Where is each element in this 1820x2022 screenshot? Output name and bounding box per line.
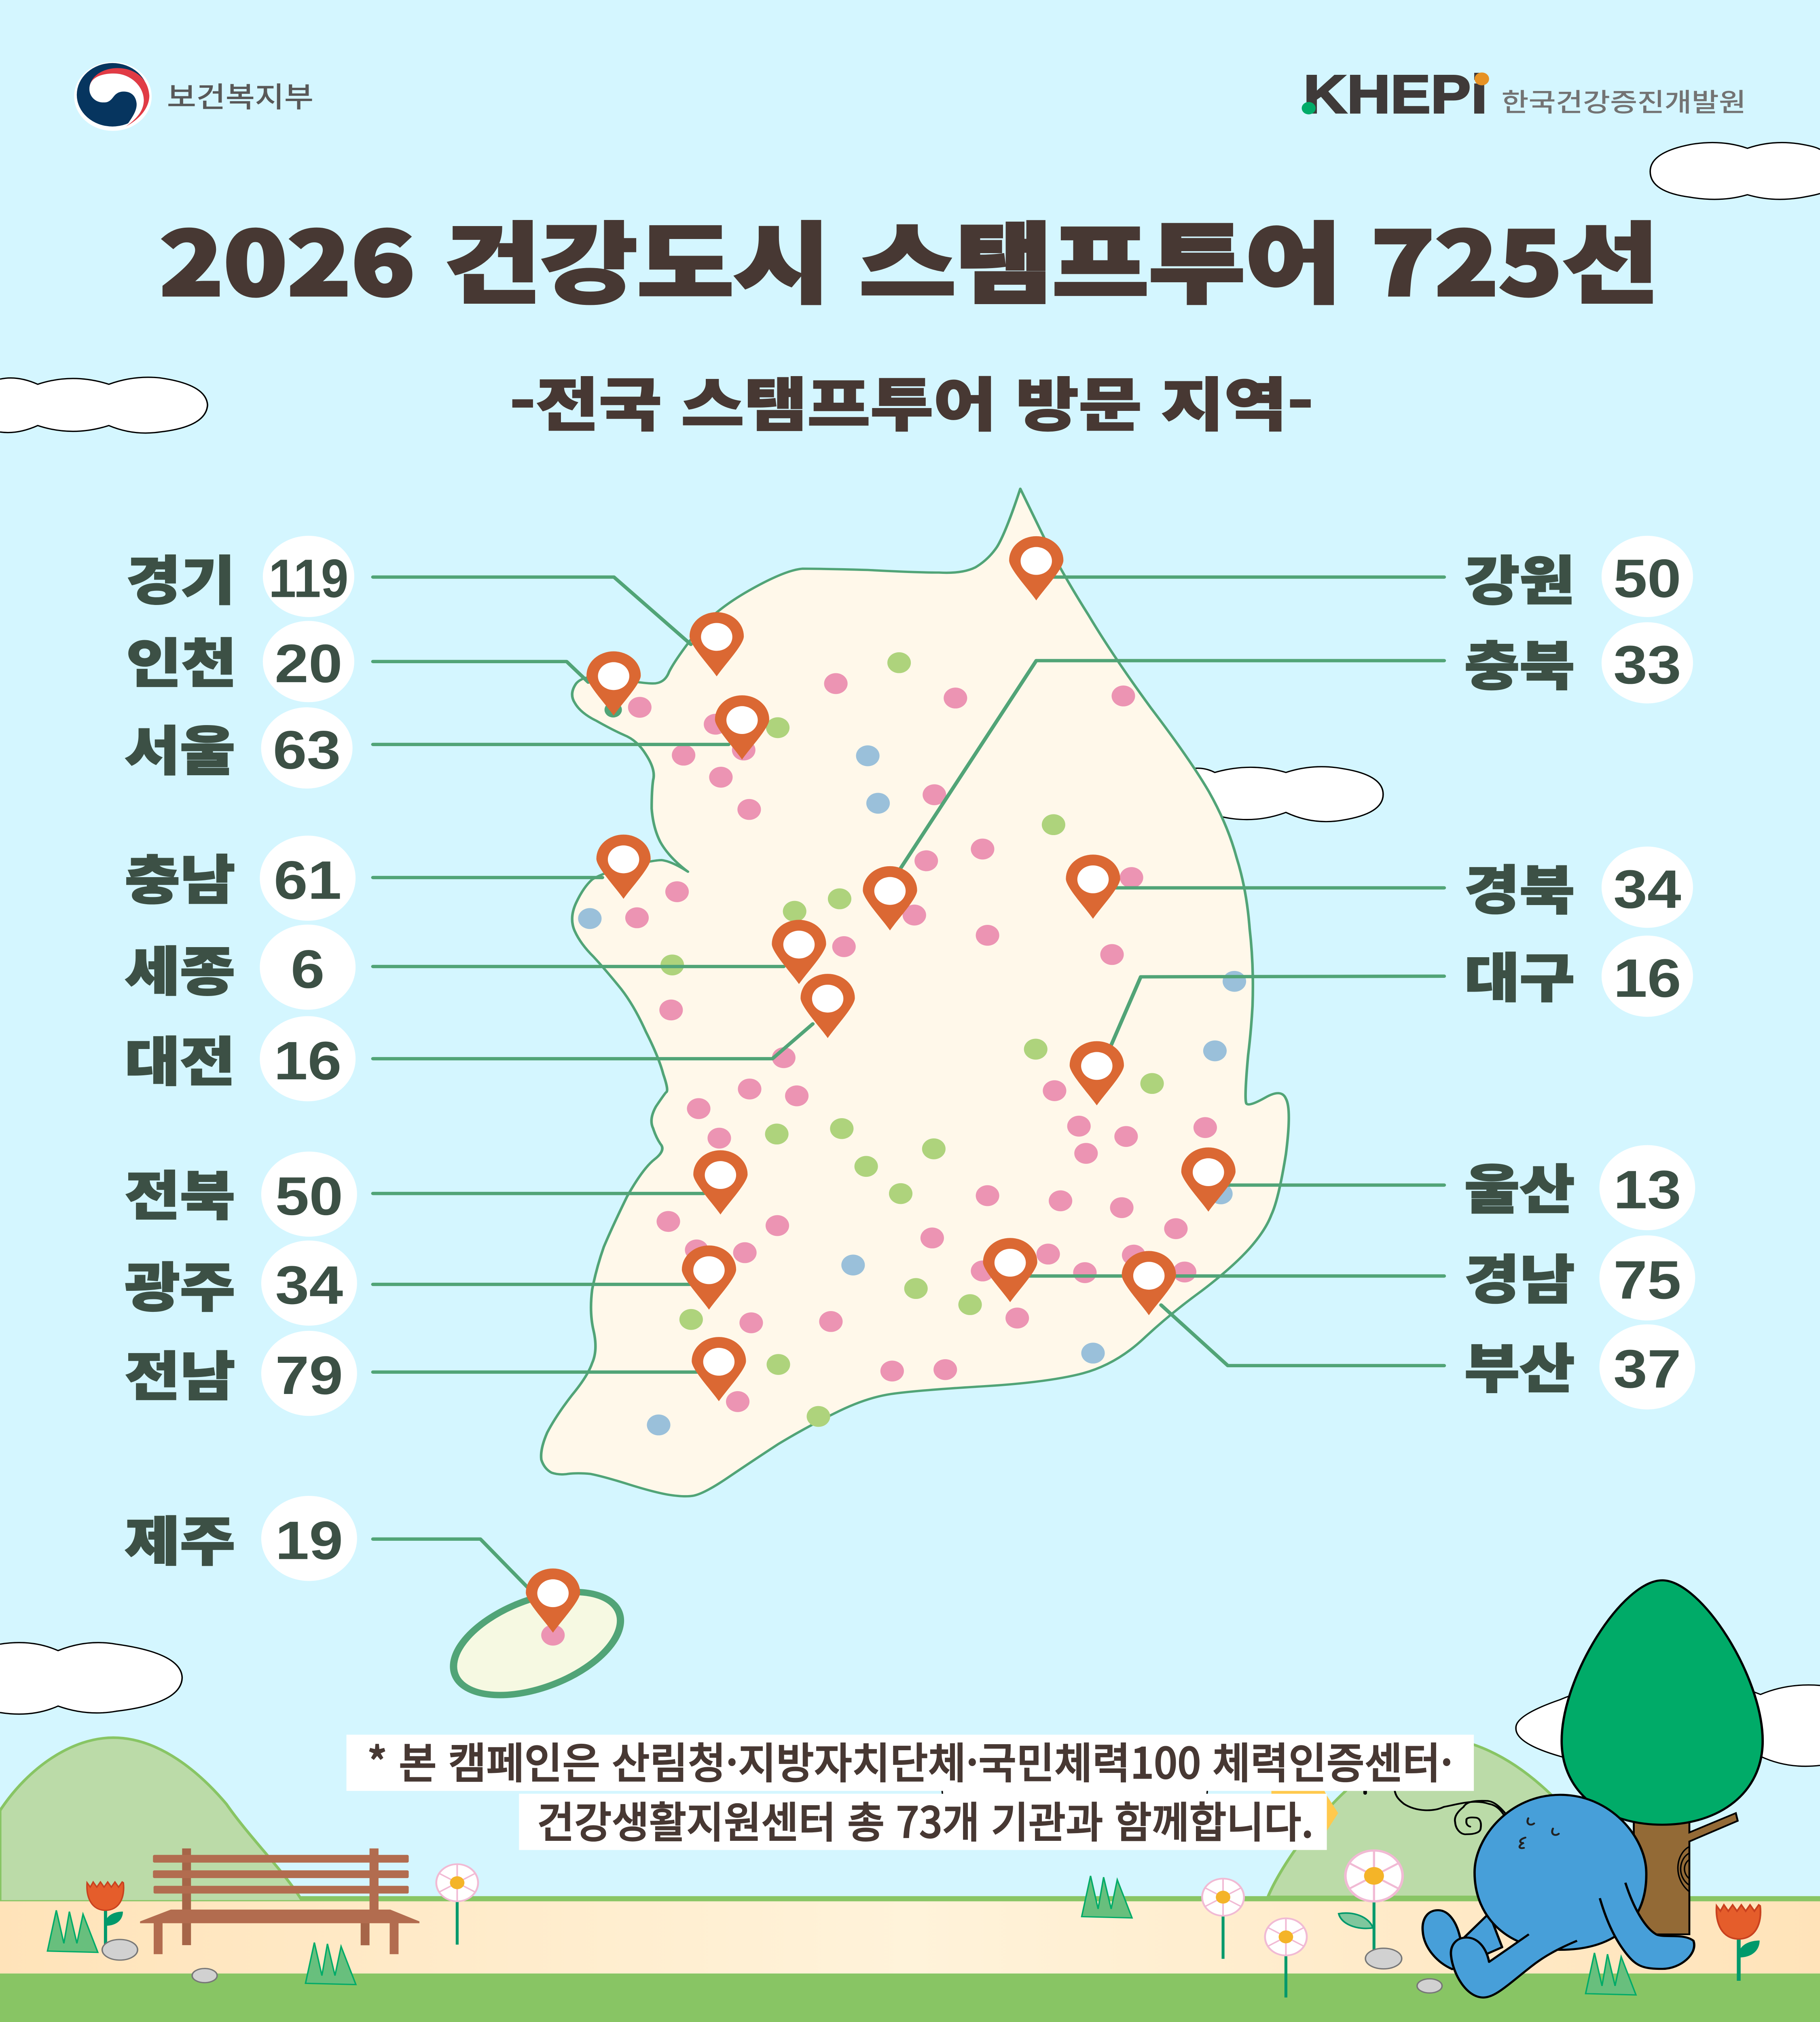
ground strip xyxy=(0,1896,1820,1902)
label: 전북 50: 전북 xyxy=(125,1154,235,1230)
cloud: behind tree xyxy=(1516,1681,1820,1766)
label: 울산 13 xyxy=(1464,1145,1695,1230)
tree xyxy=(1562,1580,1763,1934)
label: 경북 34 xyxy=(1464,846,1693,928)
flower: large xyxy=(1339,1851,1403,1950)
grass: left xyxy=(47,1910,98,1952)
logo: KHEPi: 한국건강증진개발원 xyxy=(1501,81,1746,119)
logo: Ministry of Health and Welfare xyxy=(74,62,313,131)
label: 인천 20 xyxy=(126,621,354,702)
label: 서울 63: 서울 xyxy=(125,709,235,785)
tulip: left xyxy=(87,1882,124,1945)
label: 강원 50: 강원 xyxy=(1464,539,1575,615)
label: 광주 34: 34 xyxy=(275,1255,343,1316)
stone: left xyxy=(102,1940,138,1960)
flower: middle 2 xyxy=(1265,1918,1307,1997)
label: 강원 50: 50 xyxy=(1613,548,1681,609)
grass: right xyxy=(1585,1953,1636,1995)
map dots: green xyxy=(605,652,1164,1427)
label: 광주 34: 광주 xyxy=(125,1246,235,1322)
stone: middle xyxy=(1365,1948,1402,1969)
flower: bench side xyxy=(436,1864,478,1945)
label: 경기 119: 경기 xyxy=(126,539,235,615)
label: 경남 75: 경남 xyxy=(1464,1238,1575,1314)
label: 부산 37: 37 xyxy=(1613,1339,1681,1399)
label: 전남 79: 전남 xyxy=(125,1335,235,1411)
map: mainland Korea xyxy=(541,489,1289,1496)
location pins xyxy=(526,536,1236,1633)
map dots: pink xyxy=(541,673,1217,1646)
cloud: top right xyxy=(1650,143,1820,199)
label: 전남 79: 79 xyxy=(275,1345,343,1406)
sand path xyxy=(0,1901,1820,1973)
label: 제주 19 xyxy=(125,1496,357,1581)
label: 세종 6: 6 xyxy=(291,939,325,1000)
label: 전북 50: 50 xyxy=(275,1166,343,1227)
label: 제주 19: 19 xyxy=(275,1510,343,1571)
hill: right xyxy=(1268,1737,1596,1897)
label: 대전 16: 대전 xyxy=(125,1020,235,1096)
label: 대구 16 xyxy=(1464,935,1693,1017)
tulip: right xyxy=(1716,1905,1761,1981)
label: 충북 33: 충북 xyxy=(1464,624,1575,700)
label: 대전 16 xyxy=(125,1016,356,1101)
cloud: behind map xyxy=(1176,767,1383,822)
label: 인천 20: 인천 xyxy=(126,622,237,698)
character: blue blob resting against tree xyxy=(1422,1795,1694,1997)
label: 경기 119 xyxy=(126,536,354,617)
grass: bench xyxy=(305,1943,356,1985)
label: 서울 63: 63 xyxy=(273,720,341,780)
label: 대구 16: 대구 xyxy=(1464,936,1575,1012)
label: 서울 63 xyxy=(125,707,353,789)
cloud: upper left xyxy=(0,377,207,433)
note box: 건강생활지원센터 총 73개 기관과 함께합니다. xyxy=(537,1789,1314,1850)
stone: small left xyxy=(192,1969,217,1983)
subtitle: -전국 스탬프투어 방문 지역- xyxy=(510,358,1314,442)
label: 인천 20: 20 xyxy=(275,634,343,694)
label: 충남 61 xyxy=(125,835,356,921)
label: 울산 13: 13 xyxy=(1613,1160,1681,1220)
label: 충북 33: 33 xyxy=(1613,635,1681,695)
note box: * 본 캠페인은 산림청·지방자치단체·국민체력100 체력인증센터· xyxy=(367,1729,1453,1791)
character face xyxy=(1519,1818,1559,1848)
label: 부산 37 xyxy=(1464,1324,1695,1409)
note box xyxy=(347,1729,1474,1850)
label: 전북 50 xyxy=(125,1152,357,1237)
cloud behind note xyxy=(942,1789,1208,1796)
label: 경북 34: 34 xyxy=(1613,859,1681,920)
label: 경북 34: 경북 xyxy=(1464,848,1575,925)
label: 부산 37: 부산 xyxy=(1464,1327,1575,1403)
label: 충북 33 xyxy=(1464,622,1693,703)
swirl wind xyxy=(1365,1787,1512,1834)
hill: left xyxy=(0,1738,303,1901)
label: 세종 6: 세종 xyxy=(125,930,235,1006)
title: 2026 건강도시 스탬프투어 725선 xyxy=(160,194,1659,321)
leader lines xyxy=(373,577,1444,1593)
bench xyxy=(140,1849,419,1954)
logo: KHEPi xyxy=(1302,64,1746,125)
logo: KHEPi: KHEPi xyxy=(1303,64,1488,125)
label: 대전 16: 16 xyxy=(274,1031,342,1091)
label: 광주 34 xyxy=(125,1241,357,1326)
sun behind note xyxy=(1272,1777,1338,1846)
label: 전남 79 xyxy=(125,1331,357,1416)
label: 경기 119: 119 xyxy=(269,548,349,609)
grass: middle xyxy=(1082,1876,1132,1918)
label: 경남 75 xyxy=(1464,1235,1695,1320)
label: 경남 75: 75 xyxy=(1613,1250,1681,1310)
label: 충남 61: 충남 xyxy=(125,838,235,914)
label: 세종 6 xyxy=(125,924,356,1010)
label: 충남 61: 61 xyxy=(274,850,342,911)
stone: small middle xyxy=(1417,1979,1442,1993)
label: 대구 16: 16 xyxy=(1613,948,1681,1009)
map: Jeju island xyxy=(436,1571,639,1716)
flower: middle 1 xyxy=(1202,1878,1244,1959)
label: 강원 50 xyxy=(1464,536,1693,617)
logo: Ministry of Health and Welfare: 보건복지부 xyxy=(167,74,313,115)
label: 울산 13: 울산 xyxy=(1464,1148,1575,1224)
cloud: lower left xyxy=(0,1643,182,1714)
map dots: blue xyxy=(578,745,1246,1435)
grass field xyxy=(0,1973,1820,2022)
label: 제주 19: 제주 xyxy=(125,1500,235,1576)
